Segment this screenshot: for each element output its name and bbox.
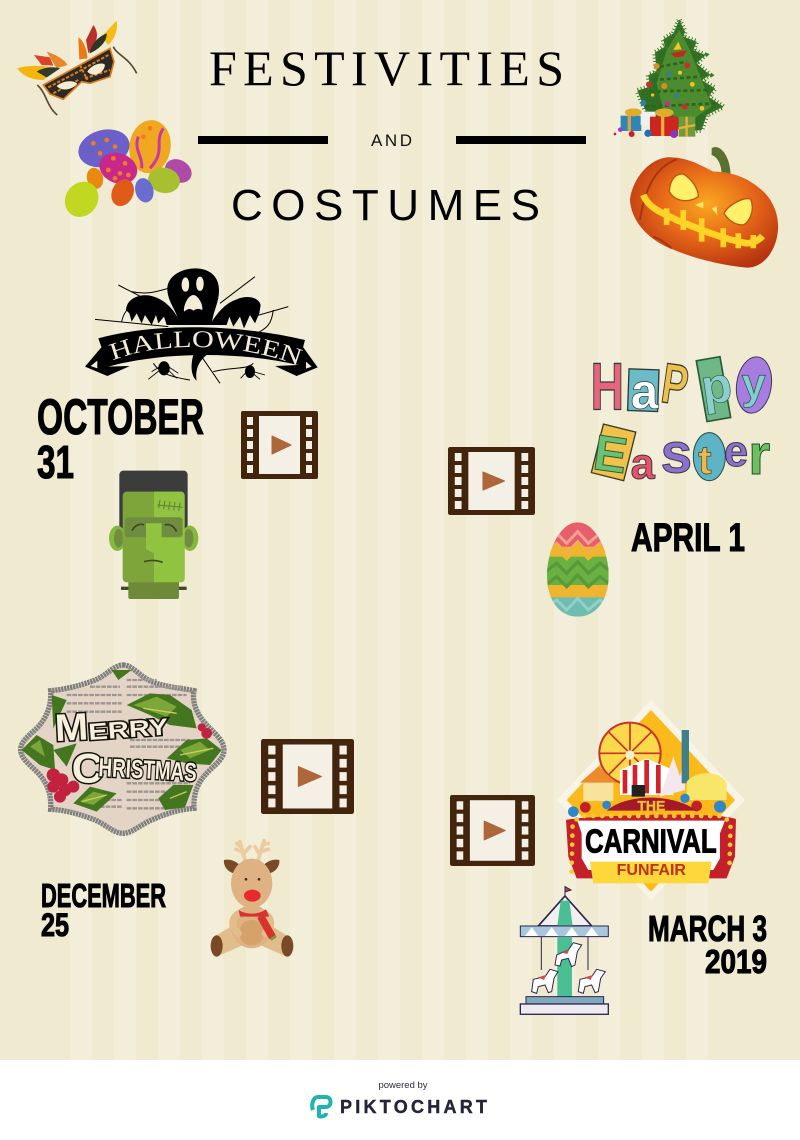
diamond backdrop: [557, 700, 745, 900]
letter r: r: [748, 424, 770, 487]
spiders: [148, 362, 265, 379]
holly berries: [47, 723, 212, 803]
date: october 31: [37, 389, 204, 488]
letter t egg: [693, 433, 725, 482]
divider: right bar: [456, 136, 586, 144]
badge lettering: C: [72, 745, 103, 792]
icon: video film 2: [448, 447, 535, 515]
letter a tile: a: [631, 363, 660, 419]
illustration: halloween ghost banner: [85, 268, 318, 384]
icon: video film 4: [450, 795, 535, 866]
merry christmas badge: [21, 665, 224, 833]
icon: carnival mask: [17, 21, 137, 115]
letter E tile: E: [590, 424, 631, 484]
icon: carousel: [520, 887, 608, 1014]
date: october 31: OCTOBER: [37, 389, 204, 445]
fairground tents and balloons: [568, 730, 727, 817]
banner lettering: [113, 347, 298, 365]
funfair ribbon: [590, 862, 712, 883]
icon: chocolate easter eggs: [58, 117, 196, 224]
carnival funfair badge: [557, 700, 745, 900]
badge plate: [21, 665, 224, 833]
ghost face: [182, 277, 204, 312]
letter y egg: [733, 355, 775, 415]
date: december 25: [41, 877, 166, 943]
icon: frankenstein head: [109, 471, 198, 599]
icon: christmas tree: [614, 20, 723, 138]
badge lettering: M: [54, 705, 89, 750]
piktochart logo mark: [312, 1097, 330, 1117]
date: october 31: 31: [37, 436, 74, 488]
icon: jack-o-lantern pumpkin: [630, 147, 778, 268]
title: festivities: FESTIVITIES: [209, 40, 564, 96]
happy easter lettering: [590, 350, 775, 488]
spider webs: [95, 277, 288, 383]
icon: video film 1: [241, 411, 318, 479]
sign panel: [577, 821, 725, 870]
holly leaves: [22, 670, 222, 812]
illustration: halloween ghost banner: HALLOWEEN: [108, 331, 304, 364]
letter t egg: t: [698, 438, 712, 482]
funfair label: FUNFAIR: [617, 862, 686, 879]
sign frame: [566, 815, 736, 878]
icon: video film 3: [261, 739, 354, 814]
carnival: CARNIVAL: [585, 824, 717, 861]
title: costumes: COSTUMES: [231, 181, 540, 230]
icon: zigzag easter egg: [547, 522, 609, 616]
letter p tile: p: [697, 356, 735, 416]
ribbon banner: [98, 327, 305, 367]
date: april 1: APRIL 1: [631, 516, 745, 560]
badge lettering: ERRY: [87, 713, 170, 745]
footer: piktochart credit: [0, 1060, 800, 1140]
ghost arms: [126, 295, 182, 325]
piktochart wordmark: PIKTOCHART: [340, 1097, 487, 1117]
powered by: powered by: [378, 1080, 428, 1091]
sign stars: [572, 816, 731, 872]
badge lettering: HRISTMAS: [98, 752, 198, 787]
newspaper lines: [67, 680, 197, 808]
date: march 3 2019: [648, 908, 767, 980]
ferris wheel: [599, 723, 661, 784]
letter a: a: [631, 440, 656, 488]
letter e: e: [724, 428, 748, 476]
the: THE: [637, 798, 665, 814]
date: december 25: 25: [41, 907, 69, 943]
date: march 3 2019: 2019: [705, 943, 767, 980]
letter H: H: [591, 350, 624, 424]
icon: reindeer: [211, 841, 293, 957]
date: december 25: DECEMBER: [41, 877, 166, 914]
letter y egg: y: [742, 360, 766, 408]
heading: and: AND: [371, 131, 412, 150]
badge lettering: [54, 705, 198, 792]
divider: left bar: [198, 136, 328, 144]
ghost: [167, 268, 219, 325]
letter s: s: [661, 423, 692, 486]
letter P: P: [658, 352, 692, 418]
